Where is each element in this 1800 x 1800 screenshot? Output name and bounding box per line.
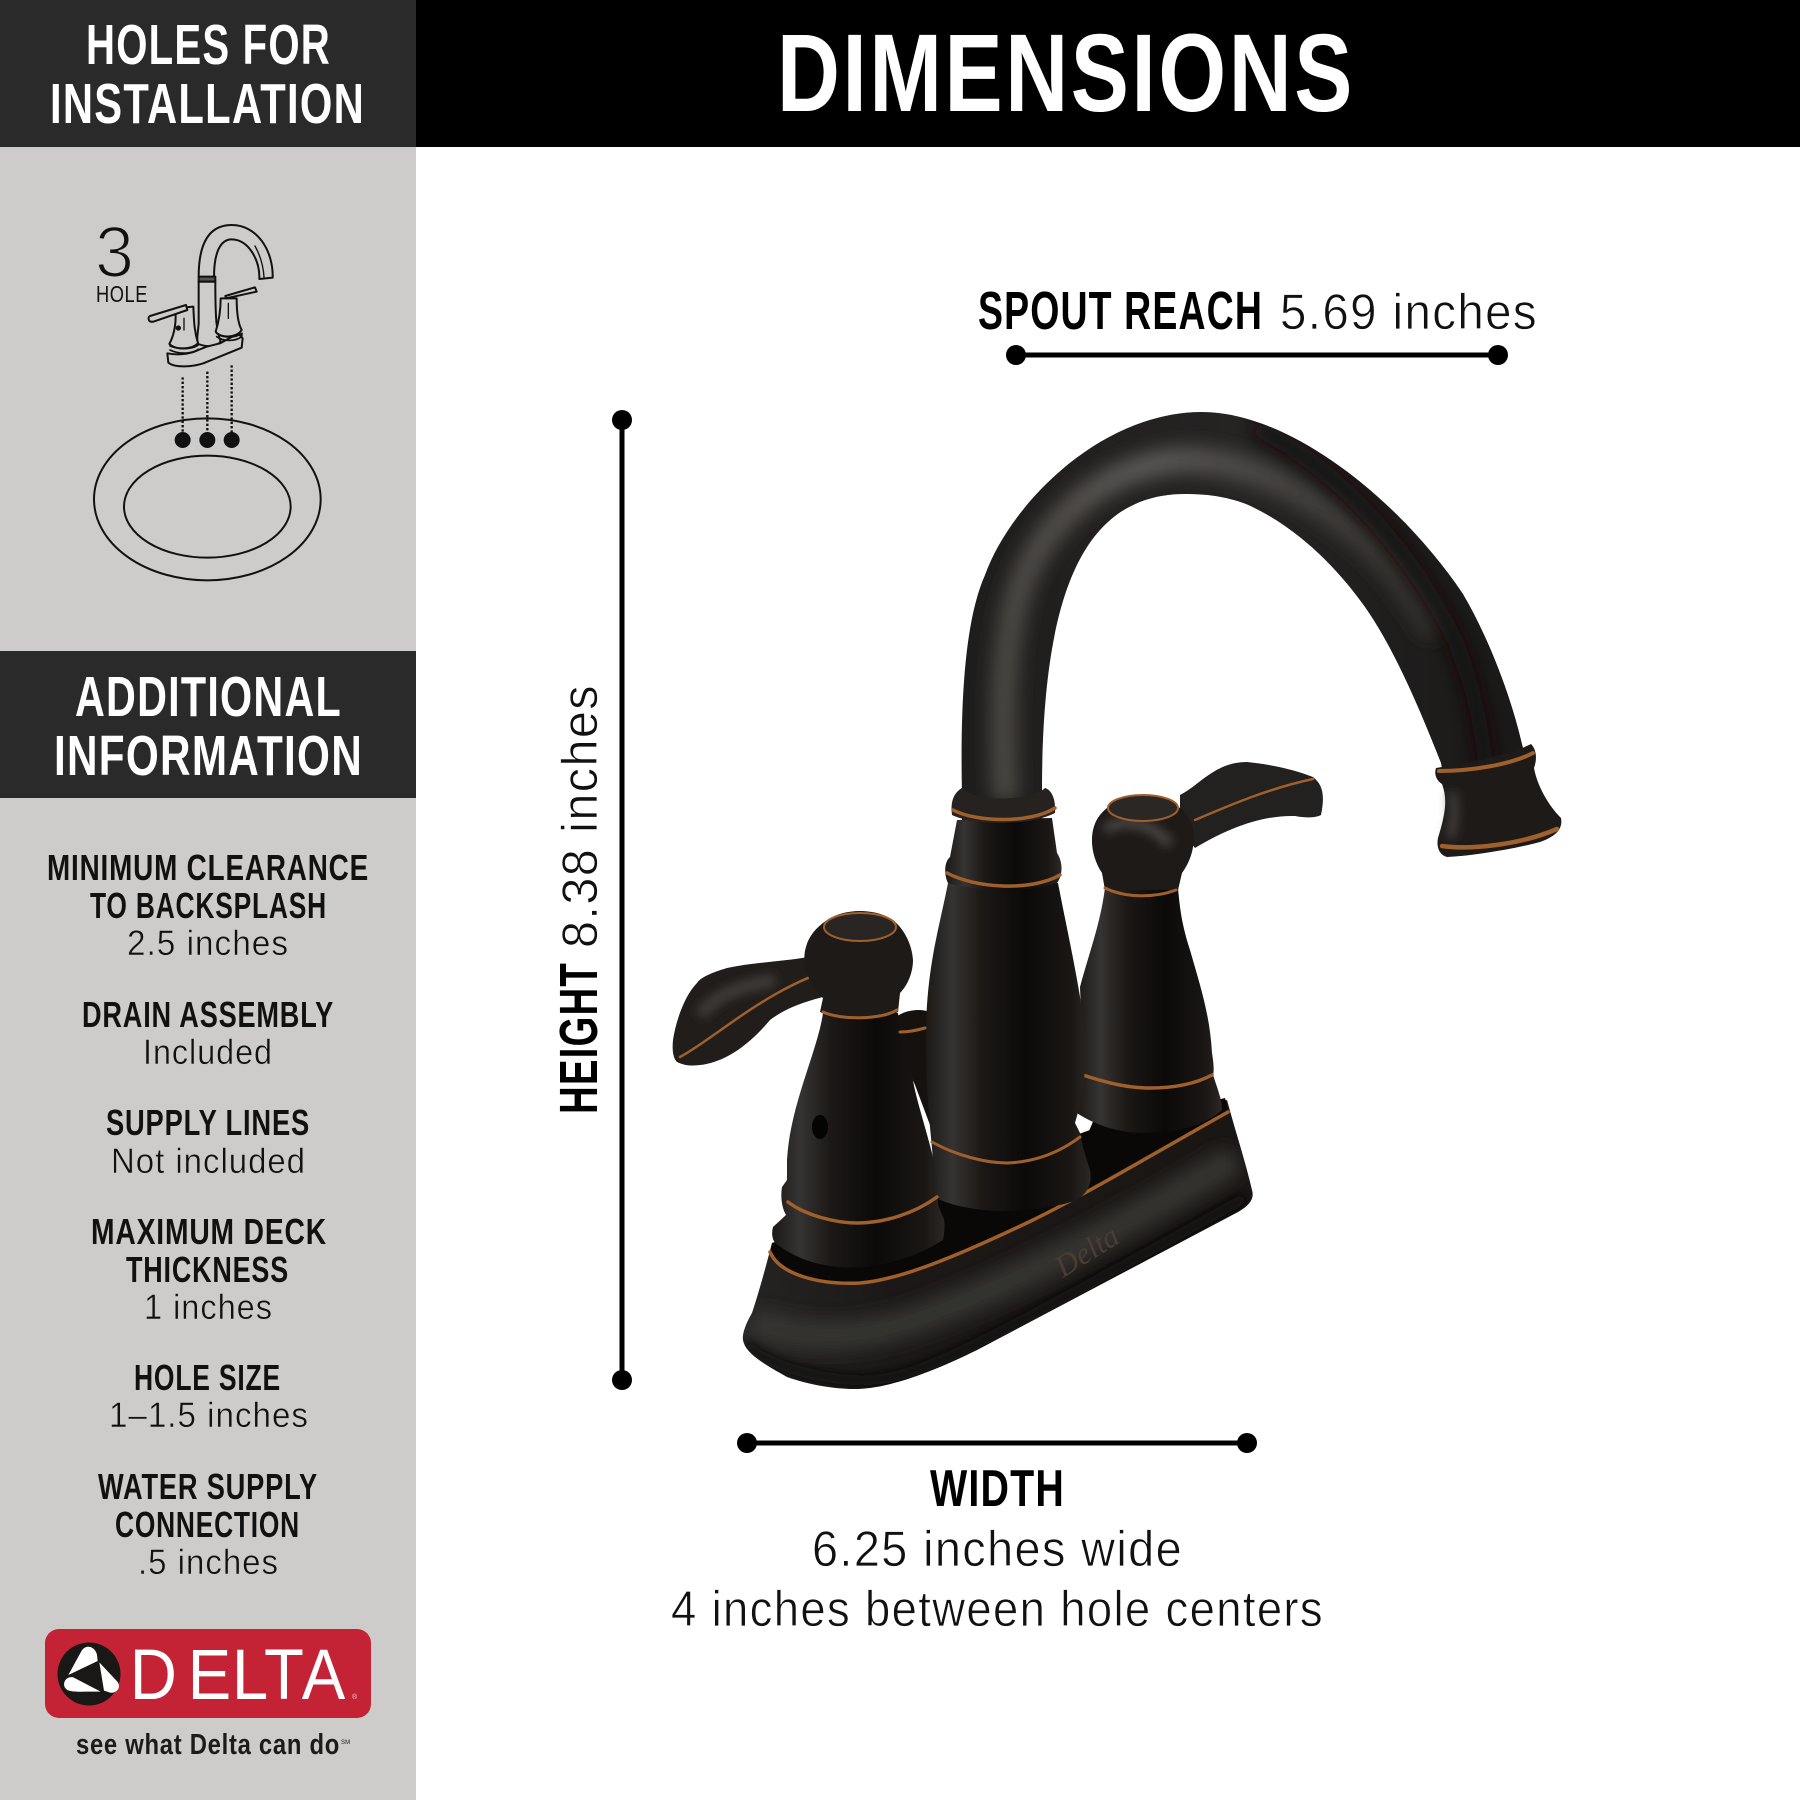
dimension: spout reach: SPOUT REACH — [978, 281, 1263, 341]
icon: three hole faucet and sink — [94, 213, 321, 580]
text block: additional information list: MINIMUM CLEARANCE — [47, 847, 369, 888]
text block: additional information list: WATER SUPPLY — [98, 1466, 318, 1507]
text block: additional information list: TO BACKSPLASH — [90, 885, 327, 926]
text block: additional information list: HOLE SIZE — [134, 1357, 281, 1398]
deck plate — [743, 1098, 1253, 1389]
dimension: width: 4 inches between hole centers — [671, 1581, 1324, 1637]
logo: Delta: ® — [352, 1693, 358, 1701]
heading: additional information: INFORMATION — [54, 724, 363, 788]
logo: Delta: see what Delta can do — [76, 1729, 340, 1761]
logo: Delta — [45, 1629, 371, 1761]
left handle — [673, 911, 944, 1267]
heading: additional information: ADDITIONAL — [75, 665, 342, 729]
title bar: dimensions — [416, 0, 1800, 147]
lift rod trim — [900, 1028, 925, 1032]
title bar: dimensions: DIMENSIONS — [777, 12, 1355, 135]
text block: additional information list: Included — [143, 1033, 273, 1072]
deck plate: Delta — [1047, 1218, 1125, 1284]
heading: holes for installation: HOLES FOR — [86, 13, 331, 77]
dimension: width: WIDTH — [930, 1460, 1065, 1518]
heading: additional information — [0, 651, 416, 798]
dimension: height — [549, 410, 632, 1390]
right handle — [1077, 762, 1323, 1133]
product image: bronze faucet — [673, 412, 1561, 1389]
text block: additional information list: .5 inches — [138, 1543, 279, 1582]
text block: additional information list: Not included — [111, 1142, 306, 1181]
text block: additional information list: 1 inches — [144, 1288, 273, 1327]
dimension: spout reach: 5.69 inches — [1280, 284, 1538, 340]
text block: additional information list: THICKNESS — [126, 1249, 289, 1290]
heading: holes for installation: INSTALLATION — [50, 72, 365, 136]
icon: three hole faucet and sink: 3 — [95, 213, 136, 293]
lift rod — [896, 1010, 930, 1125]
heading: holes for installation — [0, 0, 416, 147]
icon: three hole faucet and sink: HOLE — [96, 281, 148, 307]
spout — [962, 412, 1561, 857]
text block: additional information list: 2.5 inches — [127, 924, 289, 963]
text block: additional information list: CONNECTION — [115, 1504, 300, 1545]
centre column — [926, 788, 1091, 1211]
text block: additional information list: MAXIMUM DECK — [91, 1211, 327, 1252]
text block: additional information list: SUPPLY LINES — [106, 1102, 310, 1143]
dimension: spout reach — [978, 281, 1538, 365]
logo: Delta: SM — [341, 1740, 350, 1746]
logo: Delta: DELTA — [130, 1636, 346, 1715]
dimension: width — [671, 1433, 1324, 1637]
dimension: width: 6.25 inches wide — [812, 1521, 1183, 1577]
text block: additional information list — [47, 847, 369, 1582]
text block: additional information list: DRAIN ASSEMBLY — [82, 994, 334, 1035]
panel: left sidebar — [0, 0, 416, 1800]
text block: additional information list: 1–1.5 inches — [109, 1396, 309, 1435]
dimension: height: 8.38 inches — [552, 684, 608, 948]
dimension: height: HEIGHT — [549, 962, 609, 1114]
